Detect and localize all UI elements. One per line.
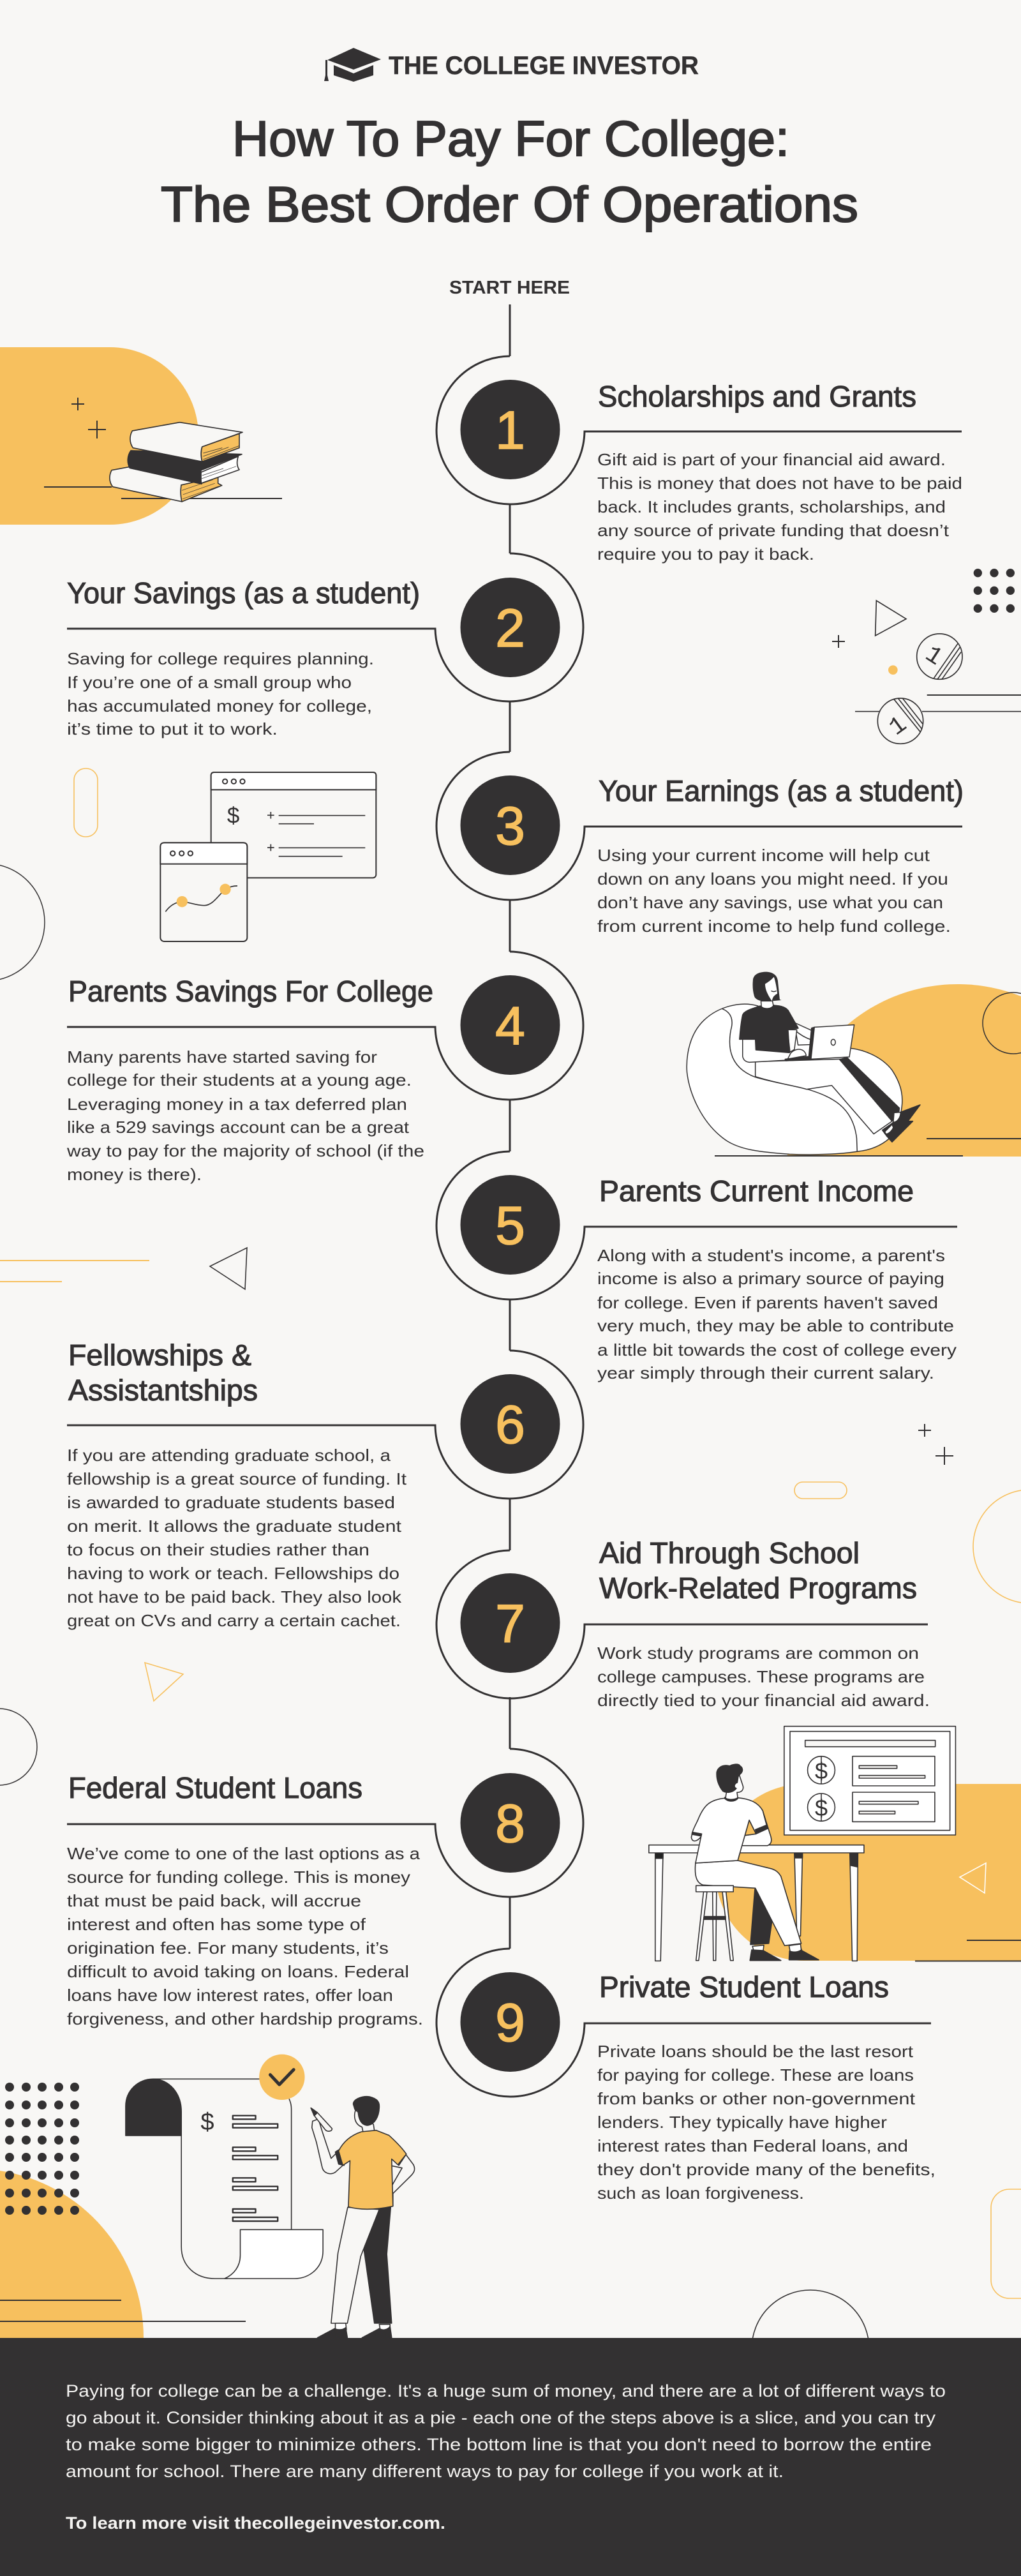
- heading: [68, 1338, 258, 1407]
- body text: college campuses. These programs are: [597, 1667, 925, 1686]
- panel: footer: [0, 2338, 1021, 2576]
- monitor, desk and person: [649, 1726, 955, 1961]
- footer paragraph: [66, 2381, 946, 2481]
- window back: $: [227, 803, 239, 828]
- body text: having to work or teach. Fellowships do: [67, 1564, 399, 1583]
- number badge 2: 2: [495, 598, 525, 658]
- body text: If you are attending graduate school, a: [67, 1446, 391, 1465]
- body text: [67, 1446, 407, 1630]
- footer paragraph: go about it. Consider thinking about it as a pie - each one of the steps above is a slice, and you can try: [66, 2408, 936, 2427]
- panel: step 2: [67, 553, 583, 738]
- ring and rule: [67, 553, 583, 701]
- decoration: gold triangle: [145, 1663, 183, 1701]
- dollar signs: [815, 1758, 828, 1821]
- gold blob: [0, 347, 198, 525]
- gold dot: [888, 665, 898, 675]
- decoration: gold pill outline: [74, 768, 98, 837]
- body text: such as loan forgiveness.: [597, 2183, 804, 2203]
- body text: a little bit towards the cost of college every: [597, 1340, 957, 1359]
- body text: back. It includes grants, scholarships, and: [597, 497, 946, 516]
- body text: college for their students at a young age.: [67, 1070, 412, 1090]
- body text: don’t have any savings, use what you can: [597, 893, 943, 912]
- body text: down on any loans you might need. If you: [597, 869, 948, 888]
- number badge 4: [461, 975, 560, 1075]
- body text: has accumulated money for college,: [67, 696, 372, 715]
- panel: step 6: [67, 1338, 583, 1630]
- body text: Along with a student's income, a parent's: [597, 1246, 945, 1265]
- panel: step 3: [436, 752, 964, 936]
- illustration: student on beanbag: [687, 972, 1021, 1157]
- gold blob: [0, 2171, 144, 2338]
- icon: coin lower: 1: [884, 710, 913, 742]
- panel: step 9: [436, 1949, 935, 2203]
- icon: plus sign: [832, 635, 845, 648]
- heading: Aid Through School: [599, 1536, 860, 1569]
- number badge 9: [461, 1972, 560, 2072]
- window front: [160, 842, 247, 941]
- heading: Your Savings (as a student): [67, 576, 420, 610]
- body text: from banks or other non-government: [597, 2089, 916, 2108]
- decoration: left circle outline: [0, 864, 45, 981]
- body text: from current income to help fund college.: [597, 917, 951, 936]
- body text: [597, 450, 962, 564]
- decoration: bottom left gold shape and dots: [0, 2083, 246, 2338]
- footer call to action: To learn more visit thecollegeinvestor.com.: [66, 2513, 445, 2533]
- body text: Saving for college requires planning.: [67, 649, 374, 668]
- ground lines: [715, 1139, 1021, 1156]
- heading: Fellowships &: [68, 1338, 251, 1372]
- body text: income is also a primary source of paying: [597, 1269, 944, 1288]
- ground lines: [915, 1940, 1021, 1961]
- body text: Work study programs are common on: [597, 1644, 919, 1663]
- ring and rule: [67, 1351, 583, 1499]
- person with pencil: [311, 2097, 415, 2338]
- ring and rule: [67, 952, 583, 1100]
- icon: coin lower: [877, 698, 923, 744]
- start here label: START HERE: [449, 278, 570, 298]
- body text: Gift aid is part of your financial aid award.: [597, 450, 946, 469]
- dollar signs: $: [815, 1795, 828, 1821]
- heading: [599, 1536, 917, 1605]
- receipt: [126, 2055, 323, 2279]
- body text: Using your current income will help cut: [597, 846, 930, 865]
- body text: source for funding college. This is money: [67, 1868, 410, 1887]
- panel: step 8: [67, 1749, 583, 2028]
- person and beanbag: [687, 972, 920, 1155]
- icon: graduation cap: [324, 48, 381, 82]
- ring and rule: [436, 1550, 928, 1698]
- body text: [597, 1246, 957, 1382]
- body text: We’ve come to one of the last options as a: [67, 1844, 421, 1863]
- number badge 8: [461, 1773, 560, 1873]
- body text: loans have low interest rates, offer loan: [67, 1986, 393, 2005]
- icon: coin upper: 1: [920, 640, 948, 672]
- heading: Private Student Loans: [599, 1970, 889, 2003]
- number badge 6: 6: [495, 1395, 525, 1455]
- number badge 1: [461, 380, 560, 479]
- body text: origination fee. For many students, it’s: [67, 1938, 389, 1958]
- ring and rule: [436, 1949, 931, 2097]
- heading: Scholarships and Grants: [598, 380, 916, 413]
- number badge 1: 1: [495, 400, 525, 460]
- body text: for college. Even if parents haven't saved: [597, 1293, 938, 1312]
- body text: like a 529 savings account can be a great: [67, 1118, 410, 1137]
- coin lines: [855, 710, 1021, 713]
- decoration: left ring: [0, 1709, 37, 1785]
- body text: way to pay for the majority of school (if the: [66, 1141, 424, 1160]
- ground lines: [0, 2300, 246, 2321]
- body text: Many parents have started saving for: [67, 1047, 377, 1067]
- illustration: student at desk: [649, 1726, 1021, 1961]
- number badge 3: [461, 775, 560, 875]
- body text: This is money that does not have to be paid: [597, 474, 962, 493]
- title: How To Pay For College:: [232, 110, 789, 167]
- body text: on merit. It allows the graduate student: [67, 1516, 402, 1536]
- heading: Your Earnings (as a student): [599, 774, 964, 807]
- body text: year simply through their current salary.: [597, 1363, 934, 1382]
- title: [161, 110, 858, 232]
- ring and rule: [436, 1151, 957, 1299]
- books: [110, 423, 242, 502]
- heading: Assistantships: [68, 1374, 258, 1407]
- ring and rule: [436, 356, 962, 504]
- ground lines: [44, 487, 282, 498]
- body text: very much, they may be able to contribute: [597, 1316, 954, 1335]
- gold backdrop: [716, 1784, 1021, 1961]
- body text: [597, 1644, 930, 1710]
- title: The Best Order Of Operations: [161, 176, 858, 232]
- icon: plus signs: [71, 398, 106, 438]
- body text: directly tied to your financial aid award.: [597, 1691, 930, 1710]
- illustration: browser windows: [160, 772, 376, 941]
- logo: [324, 48, 699, 82]
- number badge 6: [461, 1374, 560, 1474]
- dollar sign: $: [200, 2109, 214, 2136]
- triangle outline: [876, 601, 906, 636]
- timeline connectors: [509, 304, 511, 1949]
- number badge 8: 8: [495, 1793, 525, 1853]
- number badge 4: 4: [495, 996, 525, 1056]
- panel: step 5: [436, 1151, 957, 1382]
- body text: to focus on their studies rather than: [67, 1540, 369, 1559]
- panel: step 1: [436, 356, 962, 564]
- dot grid: [5, 2083, 79, 2215]
- body text: great on CVs and carry a certain cachet.: [67, 1611, 401, 1630]
- body text: Private loans should be the last resort: [597, 2042, 914, 2061]
- footer paragraph: Paying for college can be a challenge. It's a huge sum of money, and there are a lot of different ways to: [66, 2381, 946, 2400]
- body text: fellowship is a great source of funding. It: [67, 1469, 407, 1488]
- icon: coin upper: [917, 634, 962, 679]
- body text: [597, 846, 951, 936]
- decoration: bottom half ring: [752, 2290, 869, 2408]
- panel: step 7: [436, 1536, 930, 1710]
- body text: [67, 649, 374, 738]
- body text: lenders. They typically have higher: [597, 2113, 887, 2132]
- body text: not have to be paid back. They also look: [67, 1587, 402, 1606]
- body text: forgiveness, and other hardship programs.: [67, 2009, 423, 2028]
- body text: [66, 1047, 424, 1184]
- body text: money is there).: [67, 1165, 202, 1184]
- number badge 7: 7: [495, 1594, 525, 1654]
- body text: that must be paid back, will accrue: [67, 1891, 361, 1910]
- heading: Work-Related Programs: [599, 1571, 917, 1605]
- dot grid: [974, 569, 1015, 613]
- heading: Federal Student Loans: [68, 1771, 362, 1804]
- number badge 5: 5: [495, 1195, 525, 1255]
- number badge 3: 3: [495, 796, 525, 856]
- decoration: bottom right pill: [991, 2189, 1021, 2298]
- illustration: stack of books: [0, 347, 282, 525]
- body text: [597, 2042, 935, 2203]
- number badge 2: [461, 578, 560, 677]
- footer paragraph: amount for school. There are many different ways to pay for college if you work at it.: [66, 2462, 784, 2481]
- body text: [67, 1844, 423, 2028]
- body text: it’s time to put it to work.: [67, 719, 278, 738]
- white triangle: [960, 1863, 986, 1893]
- body text: require you to pay it back.: [597, 544, 814, 564]
- number badge 7: [461, 1573, 560, 1673]
- ring and rule: [67, 1749, 583, 1897]
- body text: they don't provide many of the benefits,: [597, 2160, 935, 2179]
- ring and rule: [436, 752, 962, 900]
- body text: for paying for college. These are loans: [597, 2065, 914, 2085]
- dollar signs: $: [815, 1758, 828, 1784]
- decoration: coins and shapes: [832, 569, 1021, 744]
- window back: [211, 772, 376, 878]
- heading: Parents Current Income: [599, 1174, 914, 1208]
- number badge 5: [461, 1175, 560, 1275]
- heading: Parents Savings For College: [68, 975, 433, 1008]
- illustration: receipt and person: [126, 2055, 415, 2338]
- body text: difficult to avoid taking on loans. Federal: [67, 1962, 409, 1981]
- panel: step 4: [66, 952, 583, 1184]
- body text: any source of private funding that doesn’t: [597, 521, 950, 540]
- body text: If you’re one of a small group who: [67, 673, 352, 692]
- decoration: right plus signs and gold shapes: [794, 1424, 1021, 1603]
- ring outline: [983, 992, 1021, 1054]
- decoration: gold lines and triangle: [0, 1248, 247, 1289]
- body text: interest rates than Federal loans, and: [597, 2136, 908, 2155]
- number badge 9: 9: [495, 1993, 525, 2053]
- body text: is awarded to graduate students based: [67, 1493, 395, 1512]
- body text: Leveraging money in a tax deferred plan: [67, 1095, 407, 1114]
- body text: interest and often has some type of: [67, 1915, 366, 1934]
- footer paragraph: to make some bigger to minimize others. The bottom line is that you don't need to borrow the entire: [66, 2435, 932, 2454]
- logo wordmark: THE COLLEGE INVESTOR: [389, 52, 699, 80]
- gold circle backdrop: [787, 984, 1021, 1157]
